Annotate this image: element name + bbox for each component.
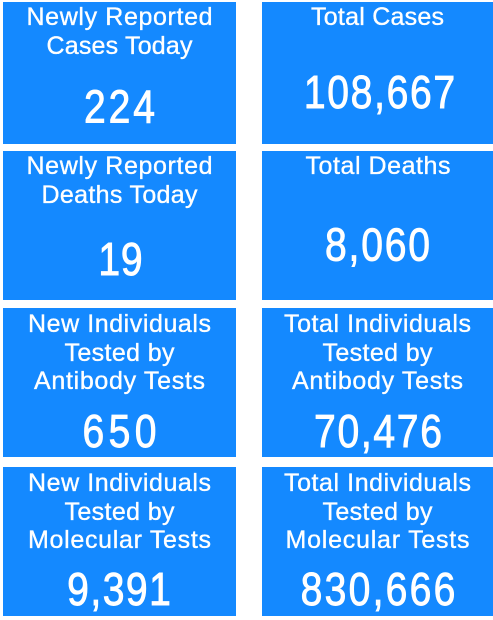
heading: new individuals tested by molecular tests: New Individuals — [28, 469, 211, 497]
panel: newly reported cases today: Cases Today — [46, 32, 193, 60]
panel: total individuals tested by antibody tests: Tested by — [322, 339, 433, 367]
panel: total deaths — [262, 151, 493, 300]
panel: new individuals tested by molecular tests — [3, 467, 236, 616]
panel: newly reported cases today — [3, 2, 236, 144]
heading: newly reported deaths today: Newly Reported — [26, 152, 212, 180]
panel: total individuals tested by antibody tests — [262, 308, 493, 458]
panel: total individuals tested by molecular tests: Tested by — [322, 498, 433, 526]
panel: newly reported deaths today: Deaths Today — [42, 181, 198, 209]
panel: new individuals tested by molecular tests: Tested by — [64, 498, 175, 526]
panel: new individuals tested by antibody tests — [3, 308, 236, 458]
panel: total individuals tested by molecular tests — [262, 467, 493, 616]
number: 8,060: 8,060 — [325, 220, 430, 271]
heading: total cases: Total Cases — [311, 3, 444, 31]
number: 108,667: 108,667 — [304, 67, 455, 119]
number: 70,476: 70,476 — [314, 406, 442, 458]
panel: total cases — [262, 2, 493, 144]
heading: total individuals tested by molecular tests: Total Individuals — [284, 469, 471, 497]
heading: new individuals tested by antibody tests: New Individuals — [28, 310, 211, 338]
heading: newly reported cases today: Newly Reported — [26, 3, 212, 31]
heading: total deaths: Total Deaths — [306, 152, 450, 180]
panel: total individuals tested by molecular tests: Molecular Tests — [286, 526, 470, 554]
panel: new individuals tested by molecular tests: Molecular Tests — [28, 526, 211, 554]
number: 830,666: 830,666 — [301, 564, 455, 616]
number: 224: 224 — [84, 82, 155, 133]
number: 9,391: 9,391 — [67, 564, 171, 616]
number: 19: 19 — [98, 234, 143, 286]
panel: new individuals tested by antibody tests: Tested by — [64, 339, 175, 367]
panel: newly reported deaths today — [3, 151, 236, 300]
panel: new individuals tested by antibody tests: Antibody Tests — [34, 367, 205, 395]
panel: total individuals tested by antibody tests: Antibody Tests — [292, 367, 463, 395]
number: 650: 650 — [83, 406, 156, 458]
heading: total individuals tested by antibody tests: Total Individuals — [284, 310, 471, 338]
